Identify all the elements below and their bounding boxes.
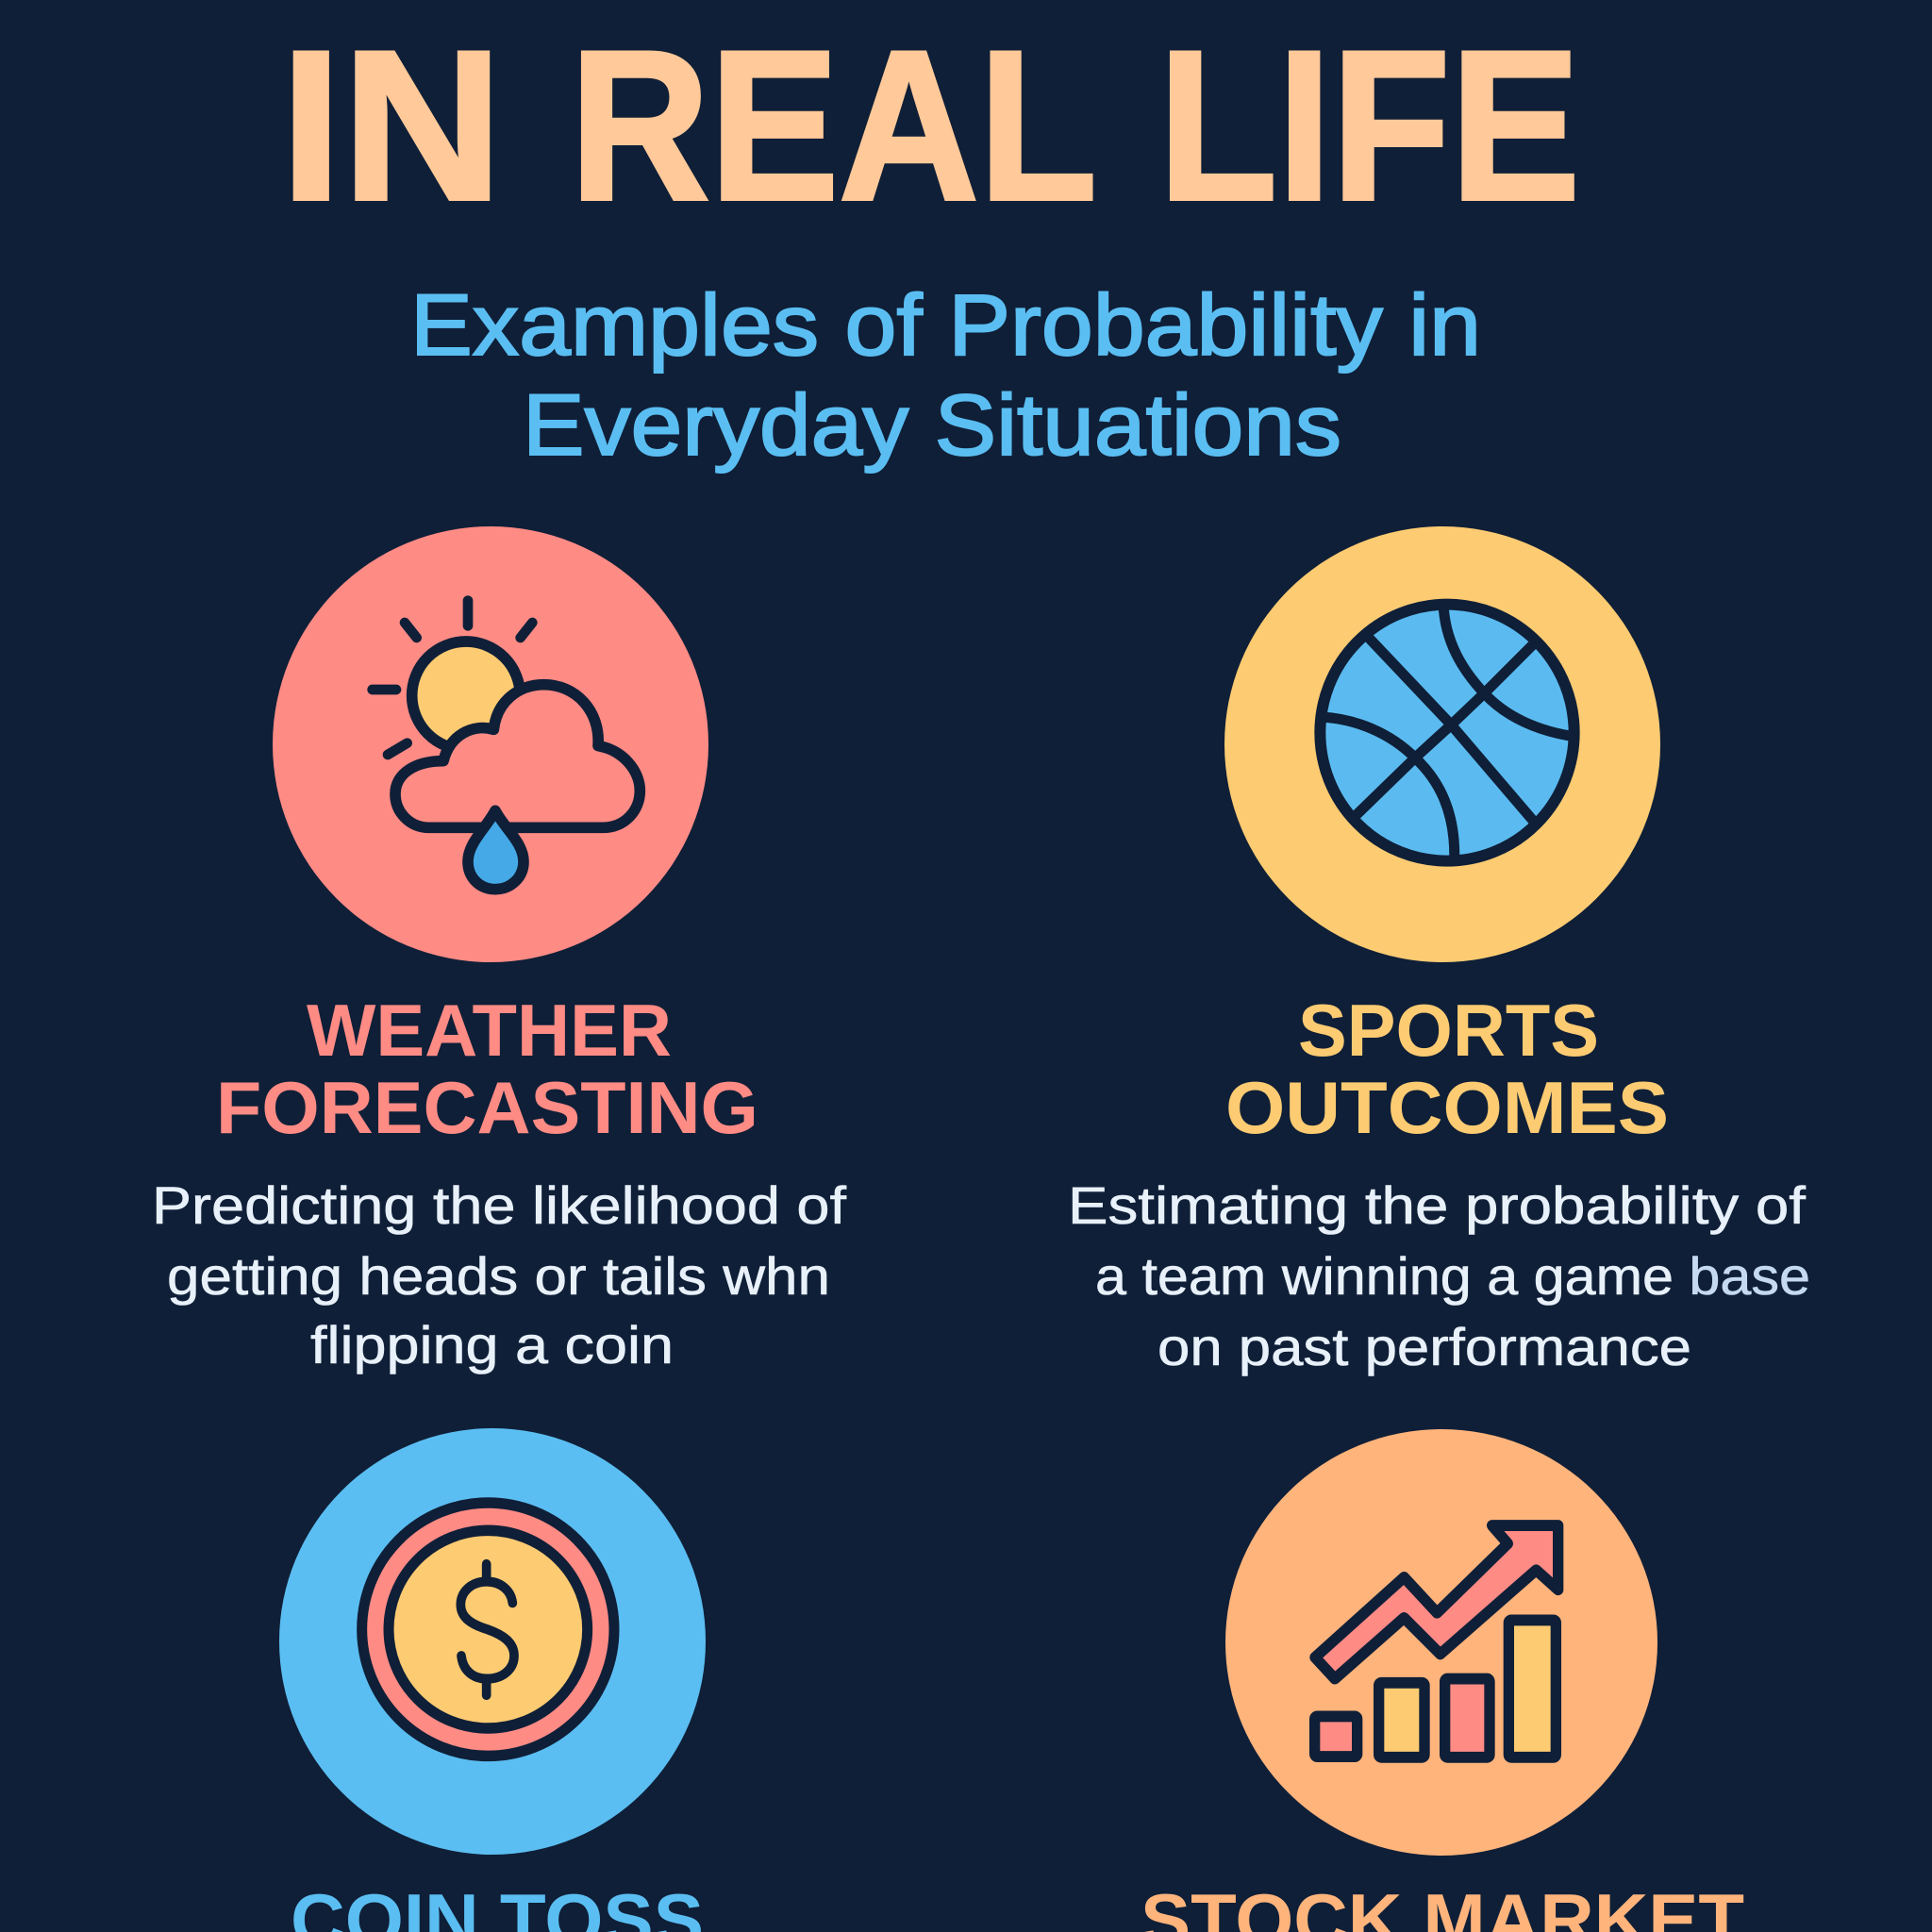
title: REAL	[570, 6, 1097, 244]
panel: sports outcomes	[1068, 526, 1810, 1376]
title: IN	[280, 6, 503, 244]
panel: stock market	[1141, 1429, 1744, 1932]
text: sports description: on past performance	[1158, 1317, 1691, 1376]
text: weather description	[152, 1175, 846, 1374]
heading: sports outcomes	[1225, 989, 1669, 1149]
panel: coin toss	[279, 1428, 706, 1932]
heading: sports outcomes: OUTCOMES	[1225, 1066, 1669, 1149]
heading: sports outcomes: SPORTS	[1298, 989, 1599, 1072]
subtitle: Everyday Situations	[523, 377, 1341, 474]
text: weather description: flipping a coin	[310, 1315, 674, 1374]
title: LIFE	[1158, 6, 1580, 244]
subtitle: Examples of Probability in	[410, 277, 1481, 374]
text: sports description: Estimating the probability of	[1068, 1175, 1806, 1235]
text: sports description: a team winning a game base	[1095, 1246, 1810, 1306]
panel: weather forecasting	[152, 526, 846, 1374]
text: weather description: getting heads or tails whn	[167, 1246, 830, 1306]
icon: basketball	[1224, 526, 1660, 962]
heading: weather forecasting: WEATHER	[307, 989, 672, 1072]
icon: rising arrow and bar chart	[1225, 1429, 1657, 1856]
heading: weather forecasting: FORECASTING	[216, 1066, 758, 1149]
subtitle	[410, 277, 1481, 474]
icon: dollar coin	[279, 1428, 706, 1855]
text: weather description: Predicting the likelihood of	[152, 1175, 846, 1235]
text: sports description	[1068, 1175, 1810, 1376]
heading: weather forecasting	[216, 989, 758, 1149]
title	[280, 6, 1580, 244]
icon: sun, cloud and rain drop	[273, 526, 708, 962]
